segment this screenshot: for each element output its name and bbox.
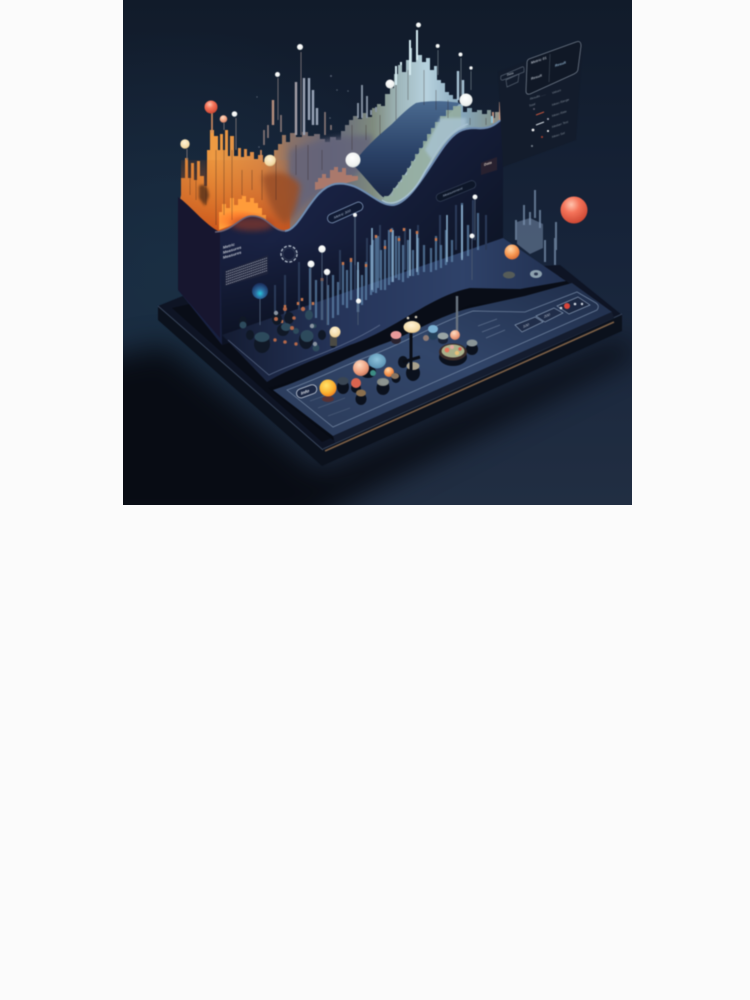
coral sphere — [384, 367, 394, 377]
panel front lip — [333, 312, 614, 443]
panel text lines — [478, 319, 505, 338]
panel tag 100: 100 — [523, 323, 529, 329]
platform edge highlight — [158, 306, 323, 450]
orange sphere right — [504, 244, 520, 260]
small card label: Data — [507, 71, 514, 77]
small peach ball — [450, 330, 460, 340]
pink front bars — [315, 167, 358, 190]
orange wave edge — [215, 216, 285, 232]
artwork panel — [123, 0, 632, 505]
right info panel — [498, 40, 583, 167]
pill label: Metric 300 — [334, 209, 351, 220]
card labels: Metric 01 — [531, 56, 547, 65]
panel inset outline — [287, 292, 598, 427]
warm glow on wall — [230, 217, 274, 231]
wall heading: Measures — [223, 249, 242, 260]
wall heading: Measures — [223, 244, 242, 255]
panel logo badge — [295, 383, 318, 399]
panel tag controls — [557, 297, 590, 314]
beige caps — [356, 362, 420, 396]
front orange bars — [219, 196, 266, 230]
right grey cap — [466, 340, 478, 346]
infographic: isometric data landscape — [123, 0, 632, 505]
bar texture gaps — [190, 70, 500, 225]
floating data specks — [256, 75, 349, 148]
upper data floor — [222, 190, 600, 440]
wall heading: Metric — [223, 241, 235, 250]
floor outline — [228, 325, 380, 375]
tall spike bars on the mountain — [187, 30, 507, 160]
wall paragraph — [225, 255, 268, 286]
cream sphere — [180, 139, 190, 149]
orange tips — [282, 228, 436, 323]
pill label right — [435, 179, 477, 203]
card labels — [531, 56, 567, 81]
blue bars — [310, 203, 478, 325]
orange sphere — [320, 380, 336, 402]
ground shadow — [123, 334, 632, 505]
wave top edge highlight — [284, 120, 502, 232]
wall labels — [223, 157, 497, 286]
table markers — [531, 108, 549, 147]
floor surface — [222, 238, 566, 382]
panel tag 200: 200 — [544, 313, 550, 319]
grey cylinder — [438, 332, 448, 344]
teal dot — [370, 370, 376, 376]
red sphere left — [204, 100, 218, 114]
colorful bowl — [439, 344, 467, 360]
panel control objects — [320, 316, 478, 405]
pink cylinder — [390, 331, 402, 344]
blue cylinder — [428, 325, 438, 340]
back wall with wave top — [178, 32, 513, 345]
floor bar forest — [260, 199, 486, 325]
raised block — [517, 218, 543, 254]
recess shadow — [268, 284, 600, 440]
platform inner ledge — [173, 281, 568, 442]
dark bases — [337, 343, 478, 405]
lower control panel — [273, 283, 614, 443]
pill label right: Measurement — [443, 186, 463, 198]
table of rows: Median Test — [552, 120, 568, 129]
grey cap — [338, 377, 348, 385]
mountain of bars — [180, 48, 500, 231]
blurred grey-blue haze — [288, 135, 372, 220]
wall lower fade — [221, 270, 341, 345]
small cylinders on upper floor — [239, 307, 336, 353]
orange depth shading — [181, 160, 290, 236]
platform side — [158, 306, 622, 466]
table of rows: Mean Set — [552, 131, 565, 139]
panel tag 100 — [515, 317, 543, 332]
peach sphere small — [220, 115, 227, 123]
platform right edge — [323, 314, 622, 449]
panel left text lines — [310, 392, 350, 416]
panel tag 200 — [536, 308, 563, 322]
pale blue ridge wash — [425, 118, 466, 160]
panel logo badge: Info — [301, 388, 309, 396]
table of rows: Results ...... — [530, 92, 546, 101]
ring chart — [281, 246, 297, 262]
scene with soft focus — [158, 22, 622, 466]
wall badge — [481, 157, 497, 175]
wall left side shade — [178, 197, 220, 338]
faint back bars — [275, 200, 486, 325]
table of rows: Mean Rate — [552, 109, 567, 118]
copper trim — [325, 322, 614, 451]
wall front face — [178, 108, 512, 345]
base platform — [158, 265, 622, 466]
blue valley — [353, 101, 460, 197]
inner wave highlight — [382, 124, 468, 203]
panel backing — [498, 101, 564, 166]
green-grey ridge bars — [384, 106, 461, 205]
big rounded card — [526, 42, 581, 94]
raised block bars — [516, 190, 556, 265]
wall heading — [223, 241, 242, 260]
red sphere large — [560, 196, 588, 224]
shadow pit at left — [199, 185, 209, 206]
card labels: Result — [555, 60, 567, 68]
yellow sphere — [264, 155, 276, 166]
table of rows: Total — [529, 102, 536, 108]
small card — [501, 67, 524, 87]
card labels: Result — [531, 73, 543, 81]
card divider — [549, 54, 550, 82]
data spheres — [180, 22, 588, 346]
floor discs — [503, 270, 542, 278]
white spheres — [232, 22, 478, 304]
ball stems — [260, 199, 475, 325]
red sphere — [351, 378, 361, 388]
cream floor sphere — [330, 326, 340, 346]
table of rows — [529, 88, 569, 139]
blue glowing sphere — [252, 283, 268, 299]
pill label — [326, 201, 364, 224]
platform top — [158, 265, 622, 450]
small blue cylinder — [423, 335, 429, 341]
brown shaded slope — [262, 173, 300, 224]
table of rows: Mean Range — [552, 97, 569, 107]
blue speckled disc — [368, 354, 386, 368]
panel surface — [273, 283, 612, 436]
panel stem — [456, 296, 458, 338]
pedestal stand — [403, 316, 420, 370]
peach sphere — [353, 360, 369, 376]
bright bars — [358, 205, 462, 312]
orange hot glow — [220, 212, 255, 226]
dark gradient backdrop — [123, 0, 632, 505]
wall badge: Data — [484, 160, 493, 167]
table of rows: Values — [552, 88, 561, 95]
